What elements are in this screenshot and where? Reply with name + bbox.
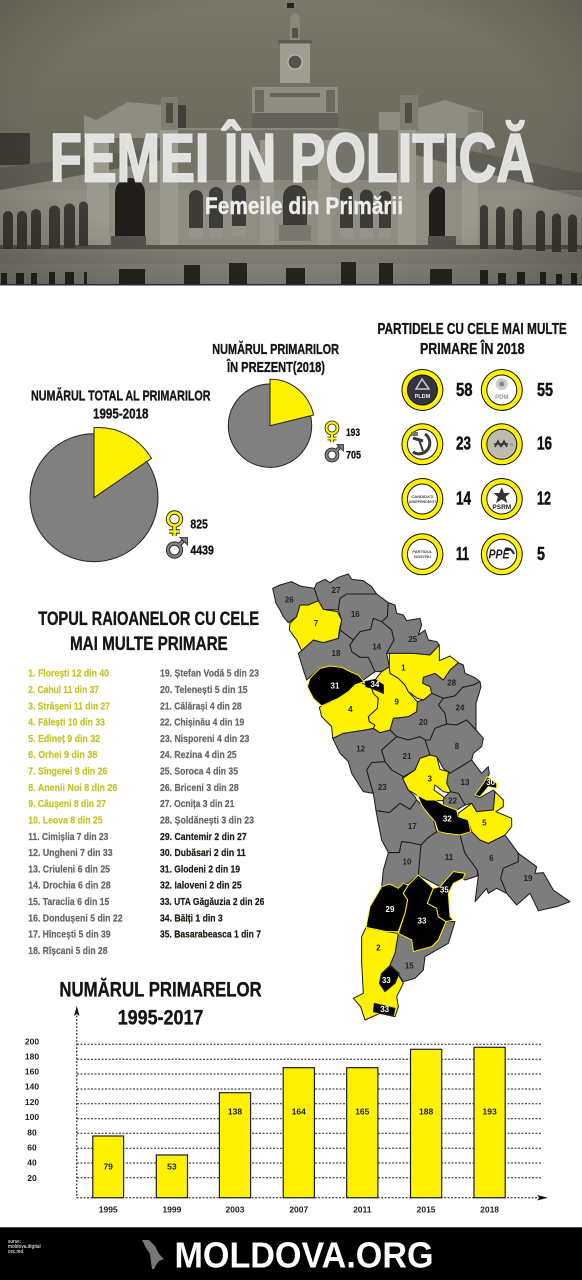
district numbers: 9 xyxy=(394,698,399,706)
ranked district list: 8. Anenii Noi 8 din 26 xyxy=(28,782,117,794)
ranked district list: 35. Basarabeasca 1 din 7 xyxy=(160,929,261,941)
ranked district list: 26. Briceni 3 din 28 xyxy=(160,782,239,794)
subtitle: Femeile din Primării xyxy=(205,193,403,220)
bar values: 188 xyxy=(419,1107,433,1117)
brand name: MOLDOVA.ORG xyxy=(174,1235,434,1276)
year labels: 2018 xyxy=(480,1205,499,1215)
icon: female total xyxy=(168,512,181,536)
ranked district list: 3. Strășeni 11 din 27 xyxy=(28,700,110,712)
badge: party with figures: PL xyxy=(510,443,514,447)
value: party with figures: 16 xyxy=(537,434,552,454)
panel: total mayors pie xyxy=(30,388,214,562)
sources: moldova.digital xyxy=(8,1244,41,1250)
badge: PPE xyxy=(481,533,523,575)
ranked district list xyxy=(28,668,264,957)
ranked district list: 27. Ocnița 3 din 21 xyxy=(160,798,234,810)
badge: PDM xyxy=(481,369,523,411)
badge: PSRM xyxy=(481,478,523,520)
heading: top districts xyxy=(38,608,259,655)
badge: PPE: PPE xyxy=(488,546,510,562)
value: PSRM: 12 xyxy=(537,488,551,508)
value: Partidul Nostru: 11 xyxy=(456,544,469,564)
district numbers: 12 xyxy=(356,744,366,754)
district numbers: 17 xyxy=(408,822,417,831)
ranked district list: 21. Călărași 4 din 28 xyxy=(160,700,242,712)
ranked district list: 24. Rezina 4 din 25 xyxy=(160,749,237,761)
header: town hall photo with title xyxy=(0,0,582,286)
value: PLDM: 58 xyxy=(456,380,472,400)
district numbers xyxy=(285,586,533,1014)
district numbers: 24 xyxy=(456,704,465,712)
y axis labels: 40 xyxy=(27,1158,37,1168)
badge: party with figures xyxy=(481,423,523,465)
axes with arrows xyxy=(74,1006,548,1200)
ranked district list: 13. Criuleni 6 din 25 xyxy=(28,863,110,875)
district numbers: 32 xyxy=(443,814,452,824)
panel: bar chart xyxy=(25,977,548,1215)
district numbers: 6 xyxy=(489,854,494,863)
badge: Partidul Nostru xyxy=(401,533,443,575)
ranked district list: 20. Telenești 5 din 15 xyxy=(160,684,248,696)
year labels: 2011 xyxy=(353,1205,372,1215)
ranked district list: 7. Sîngerei 9 din 26 xyxy=(28,766,107,778)
ranked district list: 22. Chișinău 4 din 19 xyxy=(160,717,244,729)
label: female current: 193 xyxy=(346,427,360,439)
rows of arched windows xyxy=(3,185,577,252)
ranked district list: 10. Leova 8 din 25 xyxy=(28,814,103,826)
district numbers: 23 xyxy=(378,783,387,792)
bars xyxy=(93,1047,505,1198)
southern districts xyxy=(353,792,570,1020)
heading: total mayors: 1995-2018 xyxy=(93,406,148,422)
ranked district list: 4. Fălești 10 din 33 xyxy=(28,717,105,729)
district numbers: 16 xyxy=(351,610,360,619)
badge: independent candidates: CANDIDAȚI xyxy=(411,494,433,499)
heading: total mayors: NUMĂRUL TOTAL AL PRIMARILOR xyxy=(31,388,211,404)
district numbers: 7 xyxy=(314,619,319,628)
panel: parties xyxy=(378,321,567,575)
ranked district list: 23. Nisporeni 4 din 23 xyxy=(160,733,249,745)
district numbers: 25 xyxy=(408,635,418,644)
bar values: 165 xyxy=(355,1107,370,1117)
y axis labels xyxy=(25,1036,39,1183)
district numbers: 33 xyxy=(418,916,427,926)
footer xyxy=(0,1227,582,1280)
heading: top districts: MAI MULTE PRIMARE xyxy=(70,633,228,655)
ranked district list: 9. Căușeni 8 din 27 xyxy=(28,798,106,810)
value: PDM: 55 xyxy=(537,380,553,400)
district numbers: 4 xyxy=(348,705,353,714)
badge: independent candidates: INDEPENDENȚI xyxy=(409,499,436,504)
year labels: 2003 xyxy=(226,1205,245,1215)
bar values: 53 xyxy=(167,1161,177,1171)
district numbers: 33 xyxy=(380,1005,390,1014)
ranked district list: 32. Ialoveni 2 din 25 xyxy=(160,880,242,892)
district numbers: 26 xyxy=(285,596,294,604)
district numbers: 11 xyxy=(445,853,454,862)
sources: surse: xyxy=(8,1239,21,1245)
label: female total: 825 xyxy=(190,517,208,531)
y axis labels: 180 xyxy=(25,1051,39,1061)
heading: current mayors: NUMĂRUL PRIMARILOR xyxy=(212,341,339,358)
value: independent candidates: 14 xyxy=(456,488,471,508)
district numbers: 2 xyxy=(376,944,381,952)
district numbers: 15 xyxy=(405,962,414,970)
bar values xyxy=(103,1107,497,1171)
icon: Moldova outline xyxy=(142,1240,164,1269)
badge: Partidul Nostru: PARTIDUL xyxy=(412,549,433,554)
y axis labels: 60 xyxy=(27,1142,37,1152)
district numbers: 8 xyxy=(455,742,460,751)
window sills xyxy=(189,225,391,241)
district numbers: 5 xyxy=(482,818,487,828)
district numbers: 14 xyxy=(372,642,382,652)
year labels: 2015 xyxy=(417,1205,436,1215)
y axis labels: 160 xyxy=(25,1067,39,1077)
grid lines xyxy=(77,1044,542,1178)
map of Moldova districts xyxy=(273,574,570,1020)
ranked district list: 28. Șoldănești 3 din 23 xyxy=(160,814,254,826)
bar values: 79 xyxy=(103,1161,113,1171)
district numbers: 20 xyxy=(419,718,428,727)
y axis labels: 80 xyxy=(27,1127,37,1137)
y axis labels: 100 xyxy=(25,1112,39,1122)
ranked district list: 33. UTA Găgăuzia 2 din 26 xyxy=(160,896,264,908)
district numbers: 1 xyxy=(401,664,406,672)
year labels xyxy=(99,1205,499,1215)
ranked district list: 31. Glodeni 2 din 19 xyxy=(160,863,240,875)
northern districts xyxy=(273,574,497,813)
ranked district list: 15. Taraclia 6 din 15 xyxy=(28,896,109,908)
heading: top districts: TOPUL RAIOANELOR CU CELE xyxy=(38,608,259,630)
sources: cec.md xyxy=(8,1249,23,1255)
right wing xyxy=(379,95,483,138)
pie chart: current xyxy=(228,379,314,467)
district numbers: 21 xyxy=(403,752,412,761)
ranked district list: 6. Orhei 9 din 38 xyxy=(28,749,97,761)
ranked district list: 34. Bălți 1 din 3 xyxy=(160,912,223,924)
value: communists: 23 xyxy=(456,434,471,454)
main body xyxy=(0,128,582,285)
ranked district list: 1. Florești 12 din 40 xyxy=(28,668,109,680)
icon: male total xyxy=(168,538,188,556)
year labels: 2007 xyxy=(289,1205,309,1215)
ranked district list: 16. Dondușeni 5 din 22 xyxy=(28,912,123,924)
district numbers: 35 xyxy=(440,886,449,894)
district numbers: 22 xyxy=(448,796,458,806)
ranked district list: 30. Dubăsari 2 din 11 xyxy=(160,847,246,859)
y axis labels: 120 xyxy=(25,1097,39,1107)
badge: PLDM: PLDM xyxy=(415,394,431,400)
value: PPE: 5 xyxy=(537,544,545,564)
panel: current mayors pie xyxy=(212,341,361,467)
district numbers: 33 xyxy=(382,976,391,985)
heading: parties xyxy=(378,321,567,358)
district numbers: 18 xyxy=(332,649,341,658)
badge: independent candidates xyxy=(401,478,443,520)
ranked district list: 11. Cimișlia 7 din 23 xyxy=(28,831,108,843)
ranked district list: 19. Ștefan Vodă 5 din 23 xyxy=(160,668,259,680)
district numbers: 13 xyxy=(461,778,470,787)
bar values: 164 xyxy=(292,1107,306,1117)
district numbers: 28 xyxy=(447,678,457,688)
icon: female current xyxy=(326,422,338,442)
heading: bar chart: 1995-2017 xyxy=(118,1005,203,1029)
ranked district list: 29. Cantemir 2 din 27 xyxy=(160,831,247,843)
ranked district list: 12. Ungheni 7 din 33 xyxy=(28,847,113,859)
big arched windows xyxy=(111,178,456,246)
heading: current mayors: ÎN PREZENT(2018) xyxy=(226,358,325,376)
heading: parties: PRIMARE ÎN 2018 xyxy=(420,339,525,358)
left wing xyxy=(84,97,178,138)
district numbers: 30 xyxy=(486,778,496,787)
bar values: 193 xyxy=(483,1107,497,1117)
y axis labels: 200 xyxy=(25,1036,39,1046)
badge: Partidul Nostru: NOSTRU xyxy=(414,554,431,559)
year labels: 1999 xyxy=(162,1205,182,1215)
badge: PSRM: PSRM xyxy=(492,504,511,511)
building illustration xyxy=(0,3,582,285)
district numbers: 3 xyxy=(427,774,432,784)
ranked district list: 5. Edineț 9 din 32 xyxy=(28,733,100,745)
y axis labels: 140 xyxy=(25,1082,39,1092)
icon: male current xyxy=(326,444,344,460)
district numbers: 31 xyxy=(331,682,340,690)
ranked district list: 18. Rîșcani 5 din 28 xyxy=(28,945,108,957)
heading: bar chart: NUMĂRUL PRIMARELOR xyxy=(59,977,262,1002)
badge: communists xyxy=(401,423,443,465)
label: male current: 705 xyxy=(346,450,361,462)
district numbers: 27 xyxy=(332,586,341,595)
heading: bar chart xyxy=(59,977,262,1029)
sources xyxy=(8,1239,41,1255)
ground-floor windows xyxy=(1,262,577,284)
ranked district list: 25. Soroca 4 din 35 xyxy=(160,766,238,778)
badge: PLDM xyxy=(401,369,443,411)
district numbers: 29 xyxy=(386,905,395,914)
district numbers: 34 xyxy=(371,680,380,689)
district numbers: 19 xyxy=(524,874,533,883)
badge: PDM: PDM xyxy=(495,395,508,401)
district numbers: 10 xyxy=(403,858,412,866)
pie chart: total xyxy=(30,428,158,562)
y axis labels: 20 xyxy=(27,1173,37,1183)
year labels: 1995 xyxy=(99,1205,118,1215)
heading: total mayors xyxy=(31,388,211,422)
ranked district list: 17. Hîncești 5 din 39 xyxy=(28,929,111,941)
heading: current mayors xyxy=(212,341,339,376)
bar values: 138 xyxy=(228,1107,242,1117)
ranked district list: 2. Cahul 11 din 37 xyxy=(28,684,99,696)
label: male total: 4439 xyxy=(190,543,214,557)
ranked district list: 14. Drochia 6 din 28 xyxy=(28,880,111,892)
